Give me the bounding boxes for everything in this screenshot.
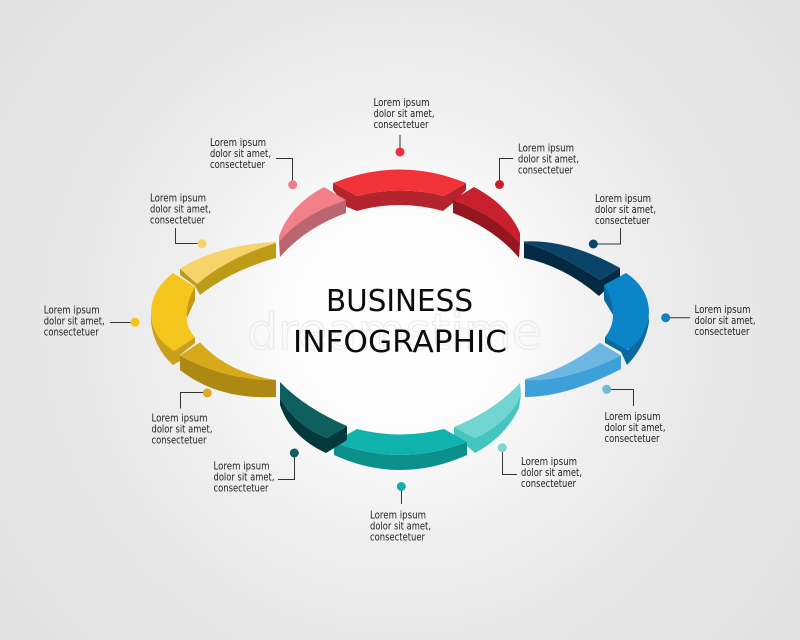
callout: light teal: consectetuer	[521, 478, 577, 490]
segment: light yellow upper left	[180, 242, 276, 295]
callout: light blue: Lorem ipsum	[604, 411, 660, 423]
callout: yellow	[44, 304, 140, 338]
callout: light yellow: consectetuer	[150, 214, 206, 226]
callout: light blue: consectetuer	[604, 433, 660, 445]
callout: dark red	[495, 142, 579, 189]
callout: dark teal: dolor sit amet,	[214, 472, 274, 484]
callout: light teal: Lorem ipsum	[521, 456, 577, 468]
segment: teal bottom	[334, 429, 467, 470]
callout: light blue: dolor sit amet,	[604, 422, 666, 434]
callout: dark red: Lorem ipsum	[518, 142, 574, 154]
callout: teal: Lorem ipsum	[370, 510, 426, 522]
callout: light blue	[602, 385, 666, 445]
callout: dark teal: Lorem ipsum	[214, 460, 270, 472]
callout: teal: dolor sit amet,	[370, 520, 431, 532]
callout: yellow: consectetuer	[44, 326, 99, 338]
title	[293, 284, 507, 360]
title: INFOGRAPHIC	[293, 325, 507, 360]
callout: gold: Lorem ipsum	[152, 412, 208, 424]
segment: light teal lower right	[454, 383, 521, 453]
callout: dark teal: consectetuer	[214, 482, 269, 494]
callout: light yellow: Lorem ipsum	[150, 192, 206, 204]
segment: blue right	[604, 273, 649, 365]
callout: gold: consectetuer	[152, 434, 207, 446]
callout: top red: consectetuer	[374, 119, 429, 131]
callout: pink: dolor sit amet,	[210, 148, 271, 160]
callout: light yellow	[150, 192, 211, 248]
callout: dark teal	[214, 448, 299, 494]
segment: dark teal lower left	[280, 382, 347, 453]
title: BUSINESS	[326, 284, 473, 319]
callout: teal	[370, 482, 431, 544]
callout: light teal	[498, 443, 582, 490]
callout: yellow: dolor sit amet,	[44, 316, 105, 328]
callout: blue: dolor sit amet,	[694, 315, 756, 327]
callout: blue: consectetuer	[694, 326, 750, 338]
callout: pink: consectetuer	[210, 159, 266, 171]
callout: pink: Lorem ipsum	[210, 137, 266, 149]
segment: yellow left	[151, 273, 195, 365]
callout: light yellow: dolor sit amet,	[150, 204, 211, 216]
segment: light blue lower right	[525, 343, 621, 397]
callout: dark red: dolor sit amet,	[518, 154, 579, 166]
callout: navy	[589, 193, 656, 248]
callout: navy: Lorem ipsum	[595, 193, 651, 205]
callout: blue: Lorem ipsum	[694, 304, 750, 316]
segment: navy upper right	[524, 241, 620, 296]
segment: dark red upper right	[453, 187, 520, 258]
callout: top red	[374, 97, 434, 156]
callout: top red: dolor sit amet,	[374, 108, 434, 120]
callout: light teal: dolor sit amet,	[521, 467, 582, 479]
segment: red top	[333, 170, 466, 211]
callout: pink	[210, 137, 297, 189]
text: dreamstime	[247, 303, 542, 361]
callout: navy: consectetuer	[595, 215, 651, 227]
callout: blue	[661, 304, 756, 338]
callout: teal: consectetuer	[370, 532, 426, 544]
callout: top red: Lorem ipsum	[374, 97, 430, 109]
callout: navy: dolor sit amet,	[595, 204, 656, 216]
segment: gold lower left	[180, 342, 276, 397]
segment: pink upper left	[279, 187, 346, 257]
callout: dark red: consectetuer	[518, 164, 574, 176]
callout: gold	[152, 388, 212, 446]
callout: yellow: Lorem ipsum	[44, 304, 100, 316]
callout: gold: dolor sit amet,	[152, 424, 212, 436]
